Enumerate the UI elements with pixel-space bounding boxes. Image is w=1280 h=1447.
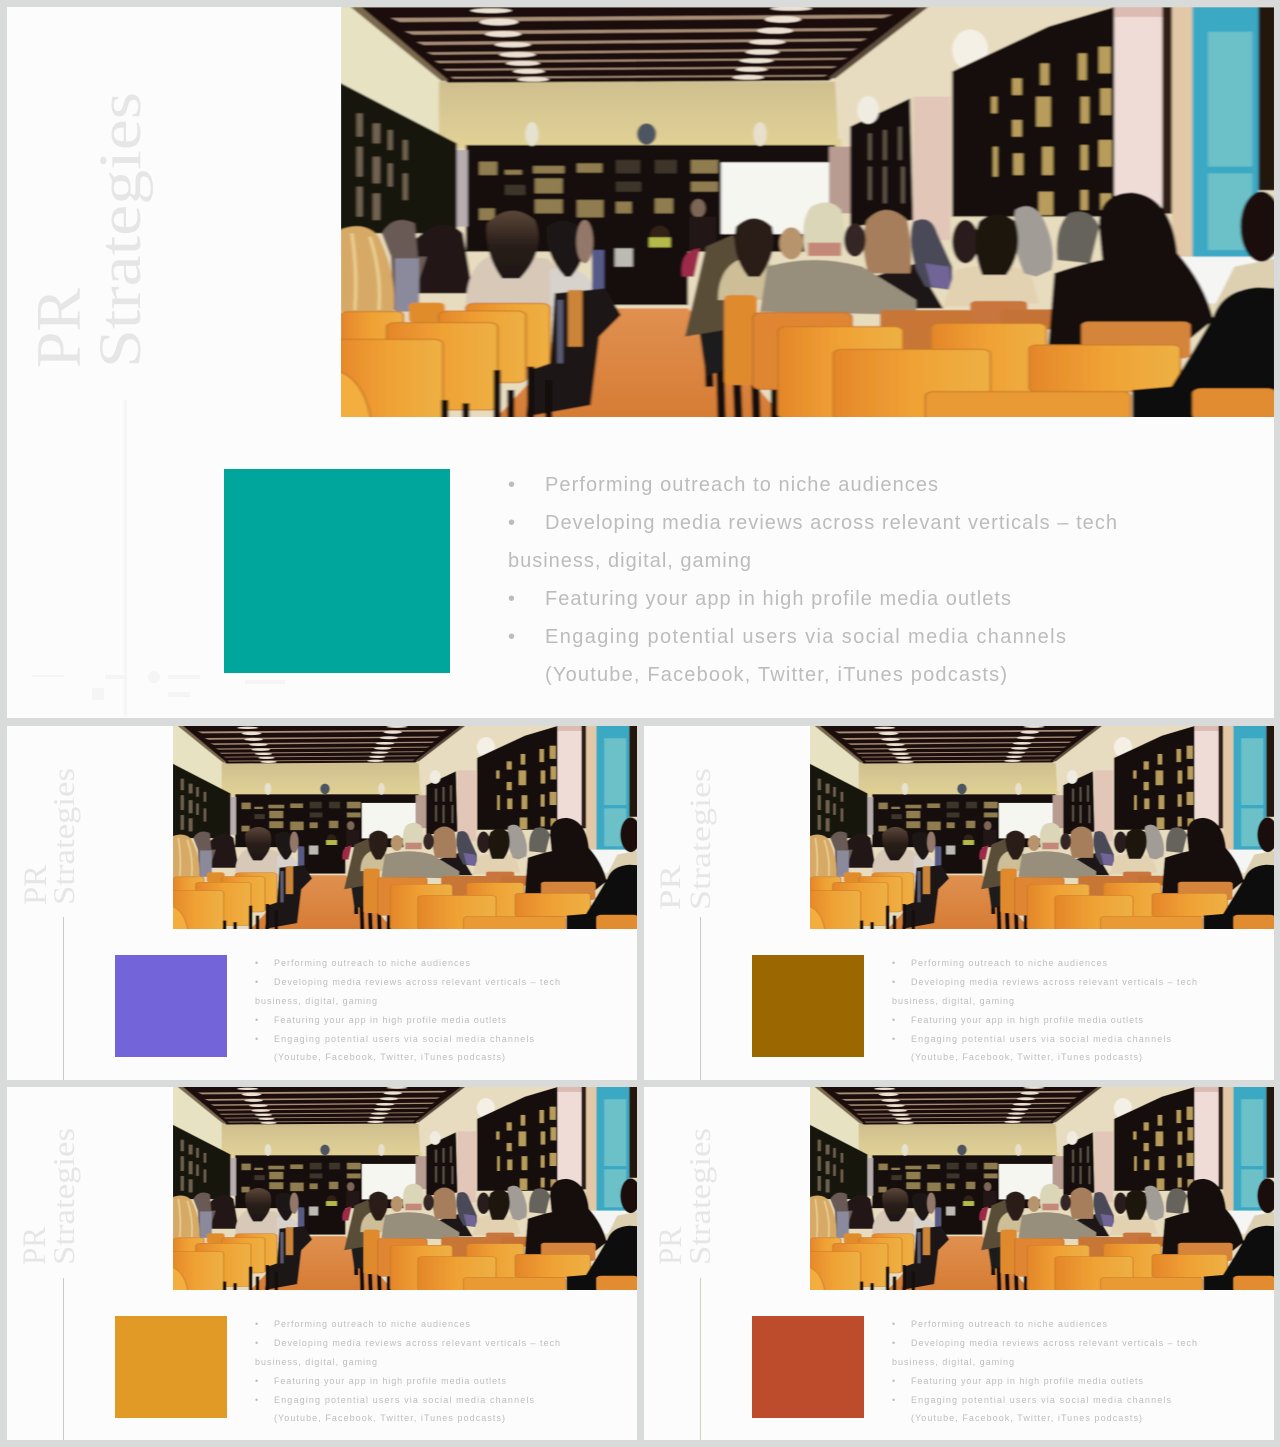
bullet list: • — [892, 958, 895, 968]
bullet list: Engaging potential users via social media channels — [911, 1034, 1172, 1044]
bullet list: • — [255, 1034, 258, 1044]
heading: Strategies: Strategies — [46, 768, 81, 905]
panel: orange slide — [7, 1084, 641, 1440]
colour block: purple — [115, 955, 227, 1057]
bullet list: • — [892, 1319, 895, 1329]
photo: audience — [169, 1084, 641, 1291]
photo: audience in library hall — [334, 0, 1280, 420]
heading: Strategies: Strategies — [87, 92, 153, 368]
heading: PR: PR — [23, 288, 94, 368]
panel: main slide — [7, 0, 1280, 718]
bullet list — [255, 1319, 560, 1423]
bullet list — [255, 958, 560, 1062]
bullet list: business, digital, gaming — [892, 1357, 1014, 1367]
bullet list: business, digital, gaming — [892, 996, 1014, 1006]
bullet list: • — [255, 1319, 258, 1329]
bullet list: • — [892, 977, 895, 987]
vertical rule — [700, 1278, 701, 1440]
bullet list: Featuring your app in high profile media outlets — [274, 1376, 506, 1386]
panel: red slide — [644, 1084, 1278, 1440]
bullet list: Performing outreach to niche audiences — [911, 1319, 1108, 1329]
vertical rule — [63, 917, 64, 1080]
bullet list: (Youtube, Facebook, Twitter, iTunes podcasts) — [911, 1413, 1142, 1423]
bullet list: • — [508, 588, 515, 610]
faint watermark marks — [32, 671, 285, 700]
colour block: brown — [752, 955, 864, 1057]
photo: audience — [169, 723, 641, 930]
heading: Strategies: Strategies — [682, 1128, 717, 1265]
bullet list: (Youtube, Facebook, Twitter, iTunes podcasts) — [545, 664, 1007, 686]
bullet list: business, digital, gaming — [255, 996, 377, 1006]
bullet list: • — [508, 474, 515, 496]
colour block: red — [752, 1316, 864, 1418]
bullet list: (Youtube, Facebook, Twitter, iTunes podcasts) — [274, 1413, 505, 1423]
bullet list — [892, 1319, 1197, 1423]
bullet list: business, digital, gaming — [255, 1357, 377, 1367]
bullet list: Performing outreach to niche audiences — [545, 474, 938, 496]
bullet list: Featuring your app in high profile media outlets — [545, 588, 1011, 610]
vertical rule — [700, 917, 701, 1080]
vertical rule — [63, 1278, 64, 1440]
bullet list: Developing media reviews across relevant verticals – tech — [274, 977, 560, 987]
bullet list: Performing outreach to niche audiences — [274, 1319, 470, 1329]
bullet list: Engaging potential users via social media channels — [274, 1034, 534, 1044]
vertical rule — [124, 400, 127, 716]
bullet list: • — [255, 1015, 258, 1025]
bullet list: • — [508, 626, 515, 648]
bullet list: Developing media reviews across relevant verticals – tech — [911, 1338, 1197, 1348]
colour block: orange — [115, 1316, 227, 1418]
heading: PR: PR — [654, 865, 687, 910]
panel: purple slide — [7, 723, 641, 1080]
colour block: teal — [224, 469, 450, 673]
bullet list: (Youtube, Facebook, Twitter, iTunes podcasts) — [911, 1052, 1142, 1062]
bullet list: • — [508, 512, 515, 534]
bullet list: Featuring your app in high profile media outlets — [911, 1015, 1144, 1025]
bullet list: Developing media reviews across relevant verticals – tech — [911, 977, 1197, 987]
bullet list: • — [255, 1395, 258, 1405]
bullet list: Engaging potential users via social media channels — [911, 1395, 1172, 1405]
bullet list: Featuring your app in high profile media outlets — [911, 1376, 1144, 1386]
panel: brown slide — [644, 723, 1278, 1080]
bullet list: • — [255, 1338, 258, 1348]
heading: PR: PR — [18, 865, 54, 905]
bullet list: Developing media reviews across relevant verticals – tech — [274, 1338, 560, 1348]
bullet list: Performing outreach to niche audiences — [274, 958, 470, 968]
bullet list: • — [892, 1034, 895, 1044]
bullet list: Featuring your app in high profile media outlets — [274, 1015, 506, 1025]
bullet list: • — [892, 1376, 895, 1386]
bullet list — [892, 958, 1197, 1062]
bullet list: Performing outreach to niche audiences — [911, 958, 1108, 968]
heading: Strategies: Strategies — [684, 768, 717, 910]
bullet list: • — [892, 1338, 895, 1348]
photo: audience — [806, 723, 1278, 930]
bullet list: • — [255, 1376, 258, 1386]
photo: audience — [806, 1084, 1278, 1291]
bullet list: • — [255, 958, 258, 968]
bullet list: • — [892, 1015, 895, 1025]
bullet list: • — [892, 1395, 895, 1405]
bullet list: Engaging potential users via social media channels — [274, 1395, 534, 1405]
bullet list: • — [255, 977, 258, 987]
heading: Strategies: Strategies — [46, 1128, 81, 1265]
bullet list: business, digital, gaming — [508, 550, 751, 572]
bullet list: (Youtube, Facebook, Twitter, iTunes podcasts) — [274, 1052, 505, 1062]
bullet list: Developing media reviews across relevant verticals – tech — [545, 512, 1117, 534]
heading: PR: PR — [653, 1227, 689, 1265]
heading: PR: PR — [17, 1227, 53, 1265]
bullet list: Engaging potential users via social media channels — [545, 626, 1066, 648]
bullet list — [508, 474, 1117, 686]
